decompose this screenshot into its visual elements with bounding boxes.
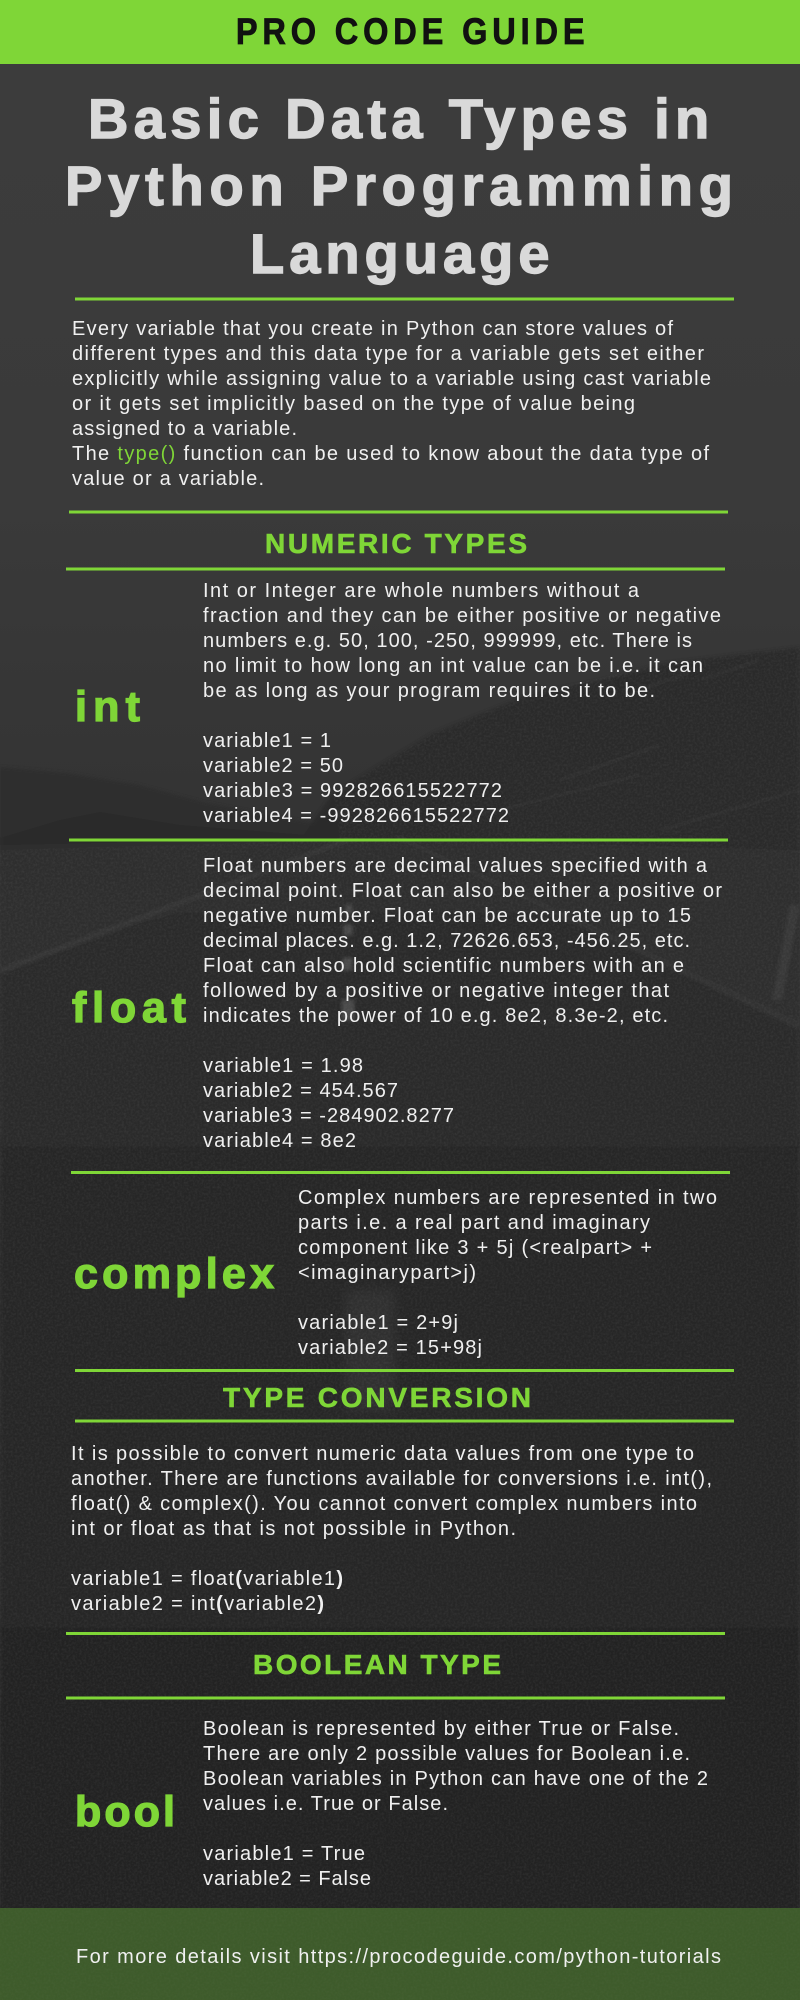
int description and examples: fraction and they can be either positive or negative bbox=[203, 605, 721, 627]
intro text: different types and this data type for a variable gets set either bbox=[72, 343, 704, 365]
int description and examples: variable1 = 1 bbox=[203, 730, 331, 752]
float description and examples: variable3 = -284902.8277 bbox=[203, 1105, 454, 1127]
bool description and examples: Boolean is represented by either True or False. bbox=[203, 1718, 679, 1740]
title: Language bbox=[250, 222, 554, 285]
top banner bbox=[0, 0, 800, 64]
footer band bbox=[0, 1908, 800, 2000]
float description and examples: variable4 = 8e2 bbox=[203, 1130, 356, 1152]
panel: type conversion text: float() & complex(). You cannot convert complex numbers into bbox=[71, 1493, 697, 1515]
intro text: assigned to a variable. bbox=[72, 418, 297, 440]
complex description and examples bbox=[298, 1187, 717, 1359]
float description and examples: decimal places. e.g. 1.2, 72626.653, -456.25, etc. bbox=[203, 930, 690, 952]
complex description and examples: <imaginarypart>j) bbox=[298, 1262, 476, 1284]
intro text bbox=[72, 318, 711, 490]
label: complex: complex bbox=[74, 1250, 274, 1298]
complex description and examples: variable2 = 15+98j bbox=[298, 1337, 482, 1359]
int description and examples: numbers e.g. 50, 100, -250, 999999, etc. There is bbox=[203, 630, 692, 652]
title: Basic Data Types in bbox=[88, 87, 715, 150]
complex description and examples: variable1 = 2+9j bbox=[298, 1312, 458, 1334]
intro text: value or a variable. bbox=[72, 468, 264, 490]
float description and examples: indicates the power of 10 e.g. 8e2, 8.3e-2, etc. bbox=[203, 1005, 668, 1027]
complex description and examples: Complex numbers are represented in two bbox=[298, 1187, 717, 1209]
int description and examples: variable3 = 992826615522772 bbox=[203, 780, 502, 802]
panel: type conversion text: int or float as that is not possible in Python. bbox=[71, 1518, 516, 1540]
intro text: or it gets set implicitly based on the type of value being bbox=[72, 393, 635, 415]
panel: complex bbox=[74, 1187, 717, 1359]
int description and examples bbox=[203, 580, 721, 827]
panel: bool bbox=[75, 1718, 708, 1890]
intro text: explicitly while assigning value to a variable using cast variable bbox=[72, 368, 711, 390]
float description and examples: variable1 = 1.98 bbox=[203, 1055, 363, 1077]
float description and examples bbox=[203, 855, 722, 1152]
title: Python Programming bbox=[65, 154, 739, 217]
float description and examples: Float numbers are decimal values specified with a bbox=[203, 855, 708, 877]
intro text: The type() function can be used to know about the data type of bbox=[72, 443, 709, 465]
title bbox=[65, 87, 739, 285]
bool description and examples: variable1 = True bbox=[203, 1843, 365, 1865]
bool description and examples: variable2 = False bbox=[203, 1868, 371, 1890]
bool description and examples: There are only 2 possible values for Boolean i.e. bbox=[203, 1743, 690, 1765]
label: int: int bbox=[75, 683, 140, 731]
heading: numeric types: NUMERIC TYPES bbox=[265, 528, 527, 559]
panel: float bbox=[72, 855, 722, 1152]
panel: int bbox=[75, 580, 721, 827]
int description and examples: be as long as your program requires it to be. bbox=[203, 680, 655, 702]
panel: type conversion text: variable1 = float(variable1) bbox=[71, 1568, 343, 1590]
bool description and examples bbox=[203, 1718, 708, 1890]
bool description and examples: Boolean variables in Python can have one of the 2 bbox=[203, 1768, 708, 1790]
float description and examples: followed by a positive or negative integer that bbox=[203, 980, 669, 1002]
heading: boolean type: BOOLEAN TYPE bbox=[253, 1649, 501, 1680]
int description and examples: variable4 = -992826615522772 bbox=[203, 805, 509, 827]
float description and examples: negative number. Float can be accurate up to 15 bbox=[203, 905, 691, 927]
complex description and examples: parts i.e. a real part and imaginary bbox=[298, 1212, 650, 1234]
int description and examples: Int or Integer are whole numbers without a bbox=[203, 580, 640, 602]
int description and examples: no limit to how long an int value can be i.e. it can bbox=[203, 655, 703, 677]
label: float: float bbox=[72, 984, 186, 1032]
footer link text: For more details visit https://procodeguide.com/python-tutorials bbox=[76, 1946, 721, 1968]
float description and examples: Float can also hold scientific numbers with an e bbox=[203, 955, 684, 977]
heading: type conversion: TYPE CONVERSION bbox=[223, 1382, 531, 1413]
panel: type conversion text: variable2 = int(variable2) bbox=[71, 1593, 324, 1615]
float description and examples: variable2 = 454.567 bbox=[203, 1080, 398, 1102]
panel: type conversion text: another. There are functions available for conversions i.e. int(), bbox=[71, 1468, 712, 1490]
panel: type conversion text: It is possible to convert numeric data values from one type to bbox=[71, 1443, 694, 1465]
intro text: Every variable that you create in Python can store values of bbox=[72, 318, 673, 340]
complex description and examples: component like 3 + 5j (<realpart> + bbox=[298, 1237, 652, 1259]
int description and examples: variable2 = 50 bbox=[203, 755, 343, 777]
brand name: PRO CODE GUIDE bbox=[236, 11, 589, 52]
bool description and examples: values i.e. True or False. bbox=[203, 1793, 448, 1815]
label: bool: bool bbox=[75, 1788, 175, 1836]
float description and examples: decimal point. Float can also be either a positive or bbox=[203, 880, 722, 902]
panel: type conversion text bbox=[71, 1443, 712, 1615]
